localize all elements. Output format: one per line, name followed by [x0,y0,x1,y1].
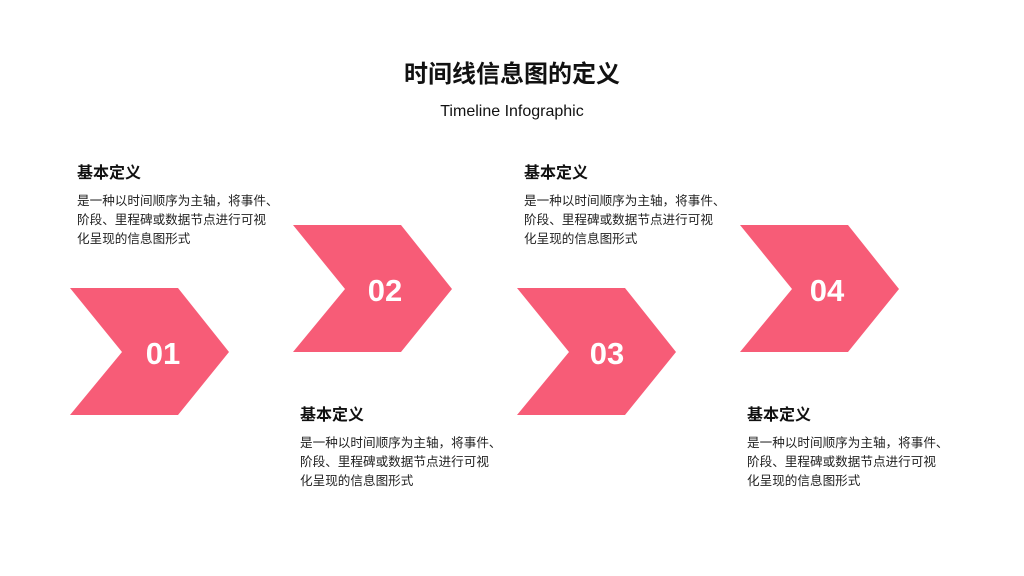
subtitle: Timeline Infographic [440,103,584,120]
text block 3: 是一种以时间顺序为主轴，将事件、 [524,194,726,208]
text block 2: 阶段、里程碑或数据节点进行可视 [300,455,489,469]
text block 1: 阶段、里程碑或数据节点进行可视 [77,213,266,227]
text block 3: 阶段、里程碑或数据节点进行可视 [524,213,713,227]
chevron 01: 01 [146,336,180,371]
text block 2: 化呈现的信息图形式 [300,474,413,488]
text block 1 [77,164,278,246]
text block 4: 是一种以时间顺序为主轴，将事件、 [747,436,948,450]
text block 1: 基本定义 [77,165,141,182]
chevron 02: 02 [368,273,402,308]
title: 时间线信息图的定义 [404,61,620,88]
text block 4: 化呈现的信息图形式 [747,474,860,488]
text block 3 [524,164,726,246]
chevron 03: 03 [590,336,624,371]
text block 2 [300,406,502,488]
text block 3: 基本定义 [524,165,588,182]
text block 1: 化呈现的信息图形式 [77,232,190,246]
text block 4 [747,406,948,488]
chevron 04 [740,225,899,352]
text block 4: 基本定义 [747,407,811,424]
chevron 01 [70,288,229,415]
text block 4: 阶段、里程碑或数据节点进行可视 [747,455,936,469]
text block 3: 化呈现的信息图形式 [524,232,637,246]
text block 1: 是一种以时间顺序为主轴，将事件、 [77,194,278,208]
text block 2: 是一种以时间顺序为主轴，将事件、 [300,436,502,450]
text block 2: 基本定义 [300,407,364,424]
chevron 04: 04 [810,273,845,308]
chevron 02 [293,225,452,352]
chevron 03 [517,288,676,415]
